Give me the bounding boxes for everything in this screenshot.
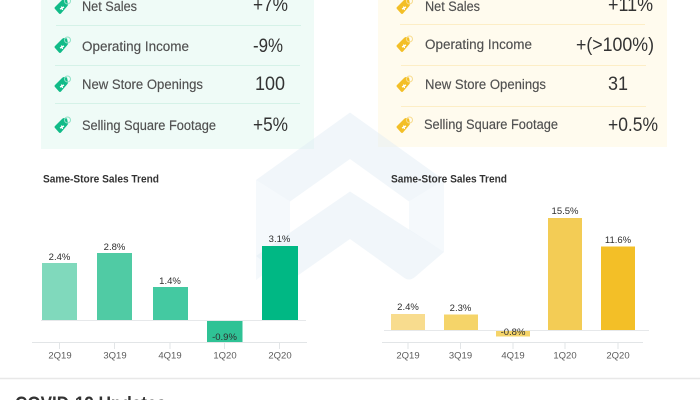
- row: selling square footage: Selling Square Footage: [82, 118, 216, 133]
- chart title: Same-Store Sales Trend: [43, 174, 159, 186]
- row: selling square footage: +5%: [253, 115, 288, 136]
- row: net sales: [54, 0, 288, 16]
- value labels: -0.8%: [501, 327, 526, 338]
- row: new store openings: New Store Openings: [82, 77, 203, 92]
- row: selling square footage: +0.5%: [608, 115, 658, 136]
- value labels: 2.3%: [450, 303, 472, 314]
- row: new store openings: 100: [255, 74, 285, 95]
- panel: right key metrics: [378, 0, 667, 147]
- value labels: 1.4%: [159, 276, 181, 287]
- chart: right same-store sales trend: [382, 174, 649, 362]
- axis labels: 4Q19: [158, 350, 182, 362]
- row: operating income: Operating Income: [425, 37, 532, 52]
- row: new store openings: [54, 74, 285, 95]
- value labels: 2.4%: [49, 252, 71, 263]
- row: operating income: +(>100%): [576, 35, 654, 56]
- bars: [42, 246, 298, 342]
- value labels: [397, 206, 632, 338]
- axis labels: 3Q19: [449, 350, 472, 362]
- value labels: [49, 234, 291, 343]
- axis labels: [48, 350, 292, 362]
- value labels: 2.8%: [104, 242, 126, 253]
- value labels: 3.1%: [269, 234, 291, 245]
- axis labels: 2Q19: [396, 350, 420, 362]
- axis labels: 2Q19: [48, 350, 72, 362]
- axis labels: 1Q20: [553, 350, 577, 362]
- axis labels: 3Q19: [103, 350, 127, 362]
- value labels: 2.4%: [397, 302, 419, 313]
- axis labels: 1Q20: [213, 350, 237, 362]
- row: new store openings: [396, 74, 628, 95]
- row: new store openings: 31: [608, 74, 628, 95]
- row: operating income: -9%: [253, 36, 283, 57]
- watermark logo: [256, 112, 444, 281]
- bars: [391, 218, 635, 336]
- chart: left same-store sales trend: [32, 174, 307, 362]
- row: selling square footage: Selling Square Footage: [424, 117, 558, 132]
- value labels: -0.9%: [212, 332, 237, 343]
- row: operating income: [396, 35, 654, 56]
- row: net sales: [396, 0, 653, 16]
- row: operating income: Operating Income: [82, 39, 189, 54]
- row: new store openings: New Store Openings: [425, 77, 546, 92]
- value labels: 11.6%: [605, 235, 632, 246]
- value labels: 15.5%: [552, 206, 579, 217]
- axis labels: 2Q20: [268, 350, 292, 362]
- row: selling square footage: [54, 115, 288, 136]
- axis labels: 2Q20: [606, 350, 630, 362]
- axis labels: 4Q19: [501, 350, 525, 362]
- axis labels: [396, 350, 630, 362]
- chart title: Same-Store Sales Trend: [391, 174, 507, 186]
- row: selling square footage: [396, 115, 658, 136]
- row: operating income: [54, 36, 283, 57]
- panel: left key metrics: [41, 0, 314, 149]
